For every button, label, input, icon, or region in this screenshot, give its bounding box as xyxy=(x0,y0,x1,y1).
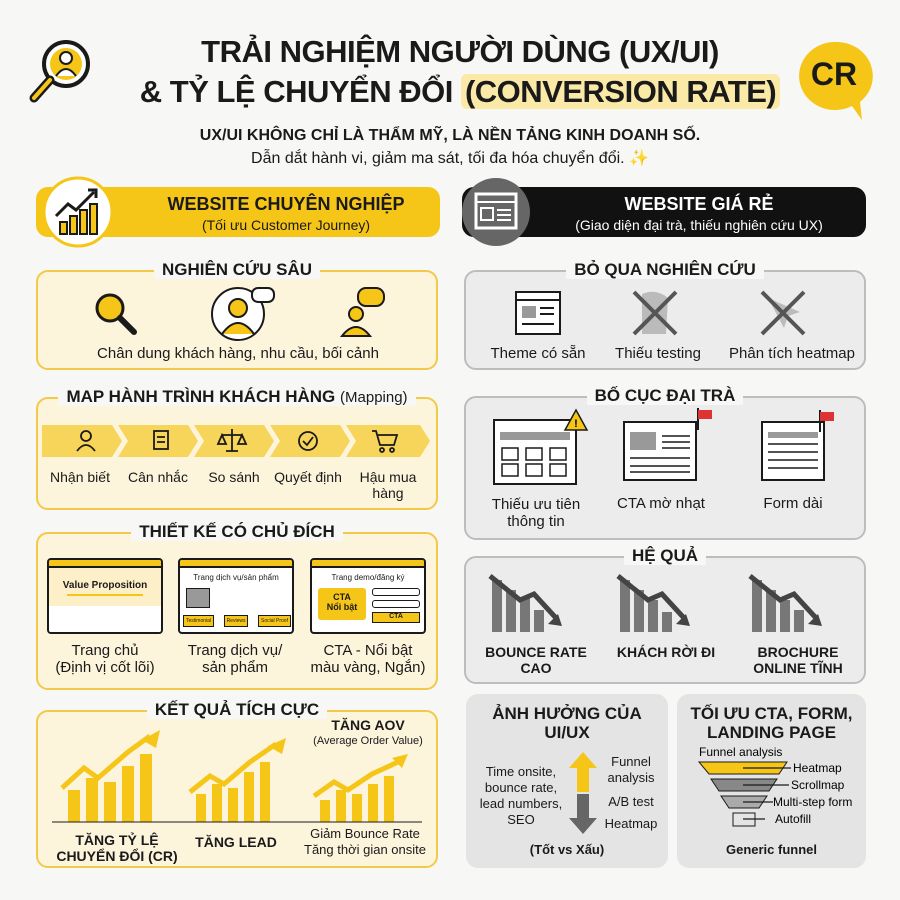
text: BỐ CỤC ĐẠI TRÀ xyxy=(595,386,735,405)
result labels: CHUYỂN ĐỔI (CR) xyxy=(56,848,178,864)
text: Chân dung khách hàng, nhu cầu, bối cảnh xyxy=(97,345,379,362)
panel: ảnh hưởng của ui/ux: bounce rate, xyxy=(485,780,557,795)
panel: bỏ qua nghiên cứu: Phân tích heatmap xyxy=(729,345,855,362)
subtitle xyxy=(200,126,700,167)
panel: ảnh hưởng của ui/ux: Funnel xyxy=(611,754,651,769)
panel: hệ quả: ONLINE TĨNH xyxy=(753,660,843,676)
panel: hệ quả xyxy=(464,556,866,684)
text: HỆ QUẢ xyxy=(632,546,698,565)
wireframe: service: Reviews xyxy=(227,618,245,624)
title: & TỶ LỆ CHUYỂN ĐỔI (CONVERSION RATE) xyxy=(140,74,776,109)
wireframe: cta: Trang demo/đăng ký xyxy=(331,573,405,582)
wireframes: ! xyxy=(574,418,578,430)
subtitle: Dẫn dắt hành vi, giảm ma sát, tối đa hóa chuyển đổi. ✨ xyxy=(251,150,649,167)
icon: person speech xyxy=(211,287,275,341)
panel: bỏ qua nghiên cứu: Thiếu testing xyxy=(615,345,701,362)
panel: map hành trình xyxy=(36,397,438,510)
panel: thiết kế có chủ đích: màu vàng, Ngắn) xyxy=(310,659,426,676)
text: NGHIÊN CỨU SÂU xyxy=(162,260,312,279)
text: BỎ QUA NGHIÊN CỨU xyxy=(574,260,756,279)
subtitle: UX/UI KHÔNG CHỈ LÀ THẨM MỸ, LÀ NỀN TẢNG KINH DOANH SỐ. xyxy=(200,127,700,144)
panel: kết quả tích cực: Giảm Bounce Rate xyxy=(310,826,420,841)
arrow steps xyxy=(42,425,430,457)
charts xyxy=(52,730,422,822)
panel: bố cục đại trà: CTA mờ nhạt xyxy=(617,495,705,512)
wireframe: service: Social Proof xyxy=(261,618,288,624)
header: website chuyên nghiệp: WEBSITE CHUYÊN NGHIỆP xyxy=(167,194,405,214)
panel: kết quả tích cực: (Average Order Value) xyxy=(313,735,423,747)
arrow up/down xyxy=(569,752,597,834)
panel: tối ưu cta: Generic funnel xyxy=(726,842,817,857)
icon: CR bubble xyxy=(799,42,873,120)
title: TRẢI NGHIỆM NGƯỜI DÙNG (UX/UI) xyxy=(201,34,719,69)
panel: nghiên cứu sâu xyxy=(36,270,438,370)
step labels: Nhận biết xyxy=(50,469,110,485)
panel: kết quả tích cực: Tăng thời gian onsite xyxy=(304,842,426,857)
panel: ảnh hưởng của ui/ux: Heatmap xyxy=(605,816,657,831)
wireframe: home xyxy=(47,558,163,634)
panel: thiết kế có chủ đích xyxy=(36,532,438,690)
icon: user chat xyxy=(340,287,385,337)
panel: thiết kế có chủ đích: Trang dịch vụ/ xyxy=(188,642,282,659)
wireframe: cta: Nổi bật xyxy=(327,602,357,612)
panel: ảnh hưởng của ui/ux: A/B test xyxy=(608,794,654,809)
panel: ảnh hưởng của ui/ux: ẢNH HƯỞNG CỦA xyxy=(492,704,642,723)
panel: bố cục đại trà: Thiếu ưu tiên xyxy=(492,496,580,513)
panel: ảnh hưởng của ui/ux: (Tốt vs Xấu) xyxy=(530,842,604,857)
header: website giá rẻ: (Giao diện đại trà, thiếu nghiên cứu UX) xyxy=(575,217,823,233)
panel: bỏ qua nghiên cứu xyxy=(464,270,866,370)
panel: kết quả tích cực: TĂNG LEAD xyxy=(195,834,277,850)
funnel xyxy=(698,746,852,826)
panel: tối ưu cta: LANDING PAGE xyxy=(707,723,836,742)
panel: bố cục đại trà: thông tin xyxy=(507,513,565,530)
result labels: TĂNG TỶ LỆ xyxy=(75,832,159,848)
panel: tối ưu cta xyxy=(677,694,866,868)
panel: ảnh hưởng của ui/ux: UI/UX xyxy=(544,723,590,742)
wireframe: cta: CTA xyxy=(389,613,403,620)
header: website chuyên nghiệp: (Tối ưu Customer Journey) xyxy=(202,217,370,233)
labels xyxy=(55,642,155,676)
wireframe: service: Trang dịch vụ/sản phẩm xyxy=(193,573,279,582)
funnel: Scrollmap xyxy=(791,778,845,792)
panel: map hành trình: Hậu mua hàng xyxy=(360,469,416,501)
panel: bố cục đại trà: Form dài xyxy=(763,495,823,512)
panel: ảnh hưởng của ui/ux: lead numbers, xyxy=(480,796,562,811)
panel: hệ quả: BOUNCE RATE xyxy=(485,644,587,660)
panel: kết quả tích cực xyxy=(36,710,438,868)
icon: growth chart xyxy=(46,176,110,248)
header: website chuyên nghiệp xyxy=(36,187,440,237)
funnel: Multi-step form xyxy=(773,795,852,809)
funnel: Heatmap xyxy=(793,761,842,775)
icon: CR bubble: CR xyxy=(811,56,857,92)
panel: kết quả tích cực: TĂNG AOV xyxy=(331,717,405,733)
labels: (Định vị cốt lõi) xyxy=(55,659,155,676)
panel: map hành trình: So sánh xyxy=(208,469,260,485)
panel: ảnh hưởng của ui/ux: analysis xyxy=(608,770,654,785)
wireframe: cta xyxy=(310,558,426,634)
header: website giá rẻ xyxy=(462,187,866,237)
icons xyxy=(515,290,806,336)
wireframe: service xyxy=(178,558,294,634)
text: KẾT QUẢ TÍCH CỰC xyxy=(155,700,319,719)
panel: bố cục đại trà xyxy=(464,396,866,540)
panel: tối ưu cta: TỐI ƯU CTA, FORM, xyxy=(690,704,853,723)
panel: hệ quả: KHÁCH RỜI ĐI xyxy=(617,644,715,660)
title xyxy=(140,34,780,109)
text: MAP HÀNH TRÌNH KHÁCH HÀNG (Mapping) xyxy=(66,387,408,406)
panel: bỏ qua nghiên cứu: Theme có sẵn xyxy=(490,345,586,362)
icon: magnifier xyxy=(96,294,137,335)
header: website giá rẻ: WEBSITE GIÁ RẺ xyxy=(624,194,774,214)
panel: thiết kế có chủ đích: CTA - Nổi bật xyxy=(324,642,412,659)
wireframes xyxy=(493,408,834,485)
labels: Trang chủ xyxy=(72,642,138,659)
panel: map hành trình: Cân nhắc xyxy=(128,469,188,485)
text: THIẾT KẾ CÓ CHỦ ĐÍCH xyxy=(139,522,335,541)
icon: browser gray xyxy=(462,178,530,246)
panel: ảnh hưởng của ui/ux: Time onsite, xyxy=(486,764,556,779)
panel: hệ quả: CAO xyxy=(520,660,552,676)
panel: ảnh hưởng của ui/ux xyxy=(466,694,668,868)
panel: thiết kế có chủ đích: sản phẩm xyxy=(202,659,268,676)
icon: magnifier user xyxy=(30,40,90,102)
panel: map hành trình: Quyết định xyxy=(274,469,342,485)
funnel: Autofill xyxy=(775,812,811,826)
declining charts xyxy=(488,574,822,632)
result labels xyxy=(56,832,178,864)
wireframe: home: Value Proposition xyxy=(63,580,147,591)
wireframe: cta: CTA xyxy=(333,592,351,602)
wireframe: service: Testimonial xyxy=(186,618,211,624)
panel: ảnh hưởng của ui/ux: SEO xyxy=(507,812,535,827)
panel: hệ quả: BROCHURE xyxy=(758,644,838,660)
